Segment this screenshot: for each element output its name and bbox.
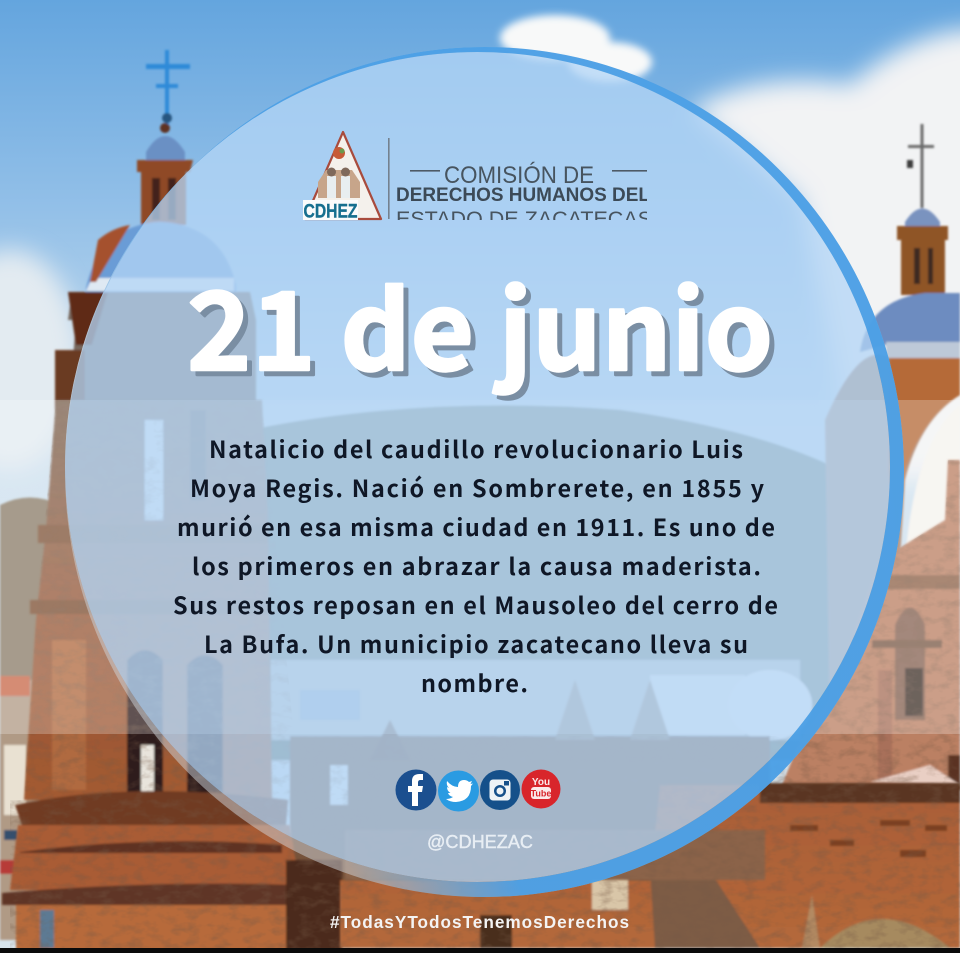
logo wordmark: COMISIÓN DE: [444, 162, 594, 189]
clouds: [0, 15, 960, 480]
body text: nombre.: [421, 665, 528, 699]
body text: Sus restos reposan en el Mausoleo del cerro de: [173, 587, 778, 621]
icon: youtube: You: [532, 777, 550, 788]
right building facade: [780, 460, 960, 790]
icon: youtube: [522, 770, 560, 808]
left church tower: [2, 50, 342, 950]
logo triangle emblem: [303, 132, 381, 222]
body text: los primeros en abrazar la causa maderista.: [192, 548, 761, 582]
blue ring crescent: [65, 47, 904, 897]
body text: murió en esa misma ciudad en 1911. Es uno de: [177, 509, 775, 543]
right church tower: [825, 124, 960, 760]
body text: Natalicio del caudillo revolucionario Luis: [209, 431, 743, 465]
title: 21 de junio: [192, 251, 778, 407]
social handle: @CDHEZAC: [427, 832, 533, 852]
logo CDHEZ: [303, 130, 647, 220]
icon: twitter: [438, 770, 479, 812]
hashtag: #TodasYTodosTenemosDerechos: [330, 912, 629, 932]
cross on right tower: [907, 124, 934, 208]
distant hills: [0, 406, 840, 940]
translucent circle panel: [65, 52, 890, 882]
brick wall and arches: [340, 783, 960, 948]
title: 21 de junio: [187, 246, 773, 402]
logo wordmark: DERECHOS HUMANOS DEL: [396, 184, 650, 206]
logo divider: [388, 138, 390, 219]
icon: facebook: [396, 770, 436, 810]
city rooftops: [300, 680, 765, 880]
cross on left tower: [146, 50, 190, 128]
photo grain texture on buildings: [0, 400, 960, 948]
body text: La Bufa. Un municipio zacatecano lleva su: [204, 626, 748, 660]
social media icons: [396, 770, 560, 812]
horizontal light band: [0, 400, 960, 734]
bottom black bar: [0, 948, 960, 953]
logo wordmark: [397, 162, 647, 220]
icon: instagram: [480, 770, 520, 810]
body text: Moya Regis. Nació en Sombrerete, en 1855 y: [190, 470, 765, 504]
body text: [173, 431, 778, 699]
icon: youtube: Tube: [531, 788, 551, 798]
logo triangle emblem: CDHEZ: [304, 200, 358, 222]
logo wordmark: ESTADO DE ZACATECAS: [396, 208, 652, 231]
ring rim: grey lower-left: [65, 47, 904, 897]
